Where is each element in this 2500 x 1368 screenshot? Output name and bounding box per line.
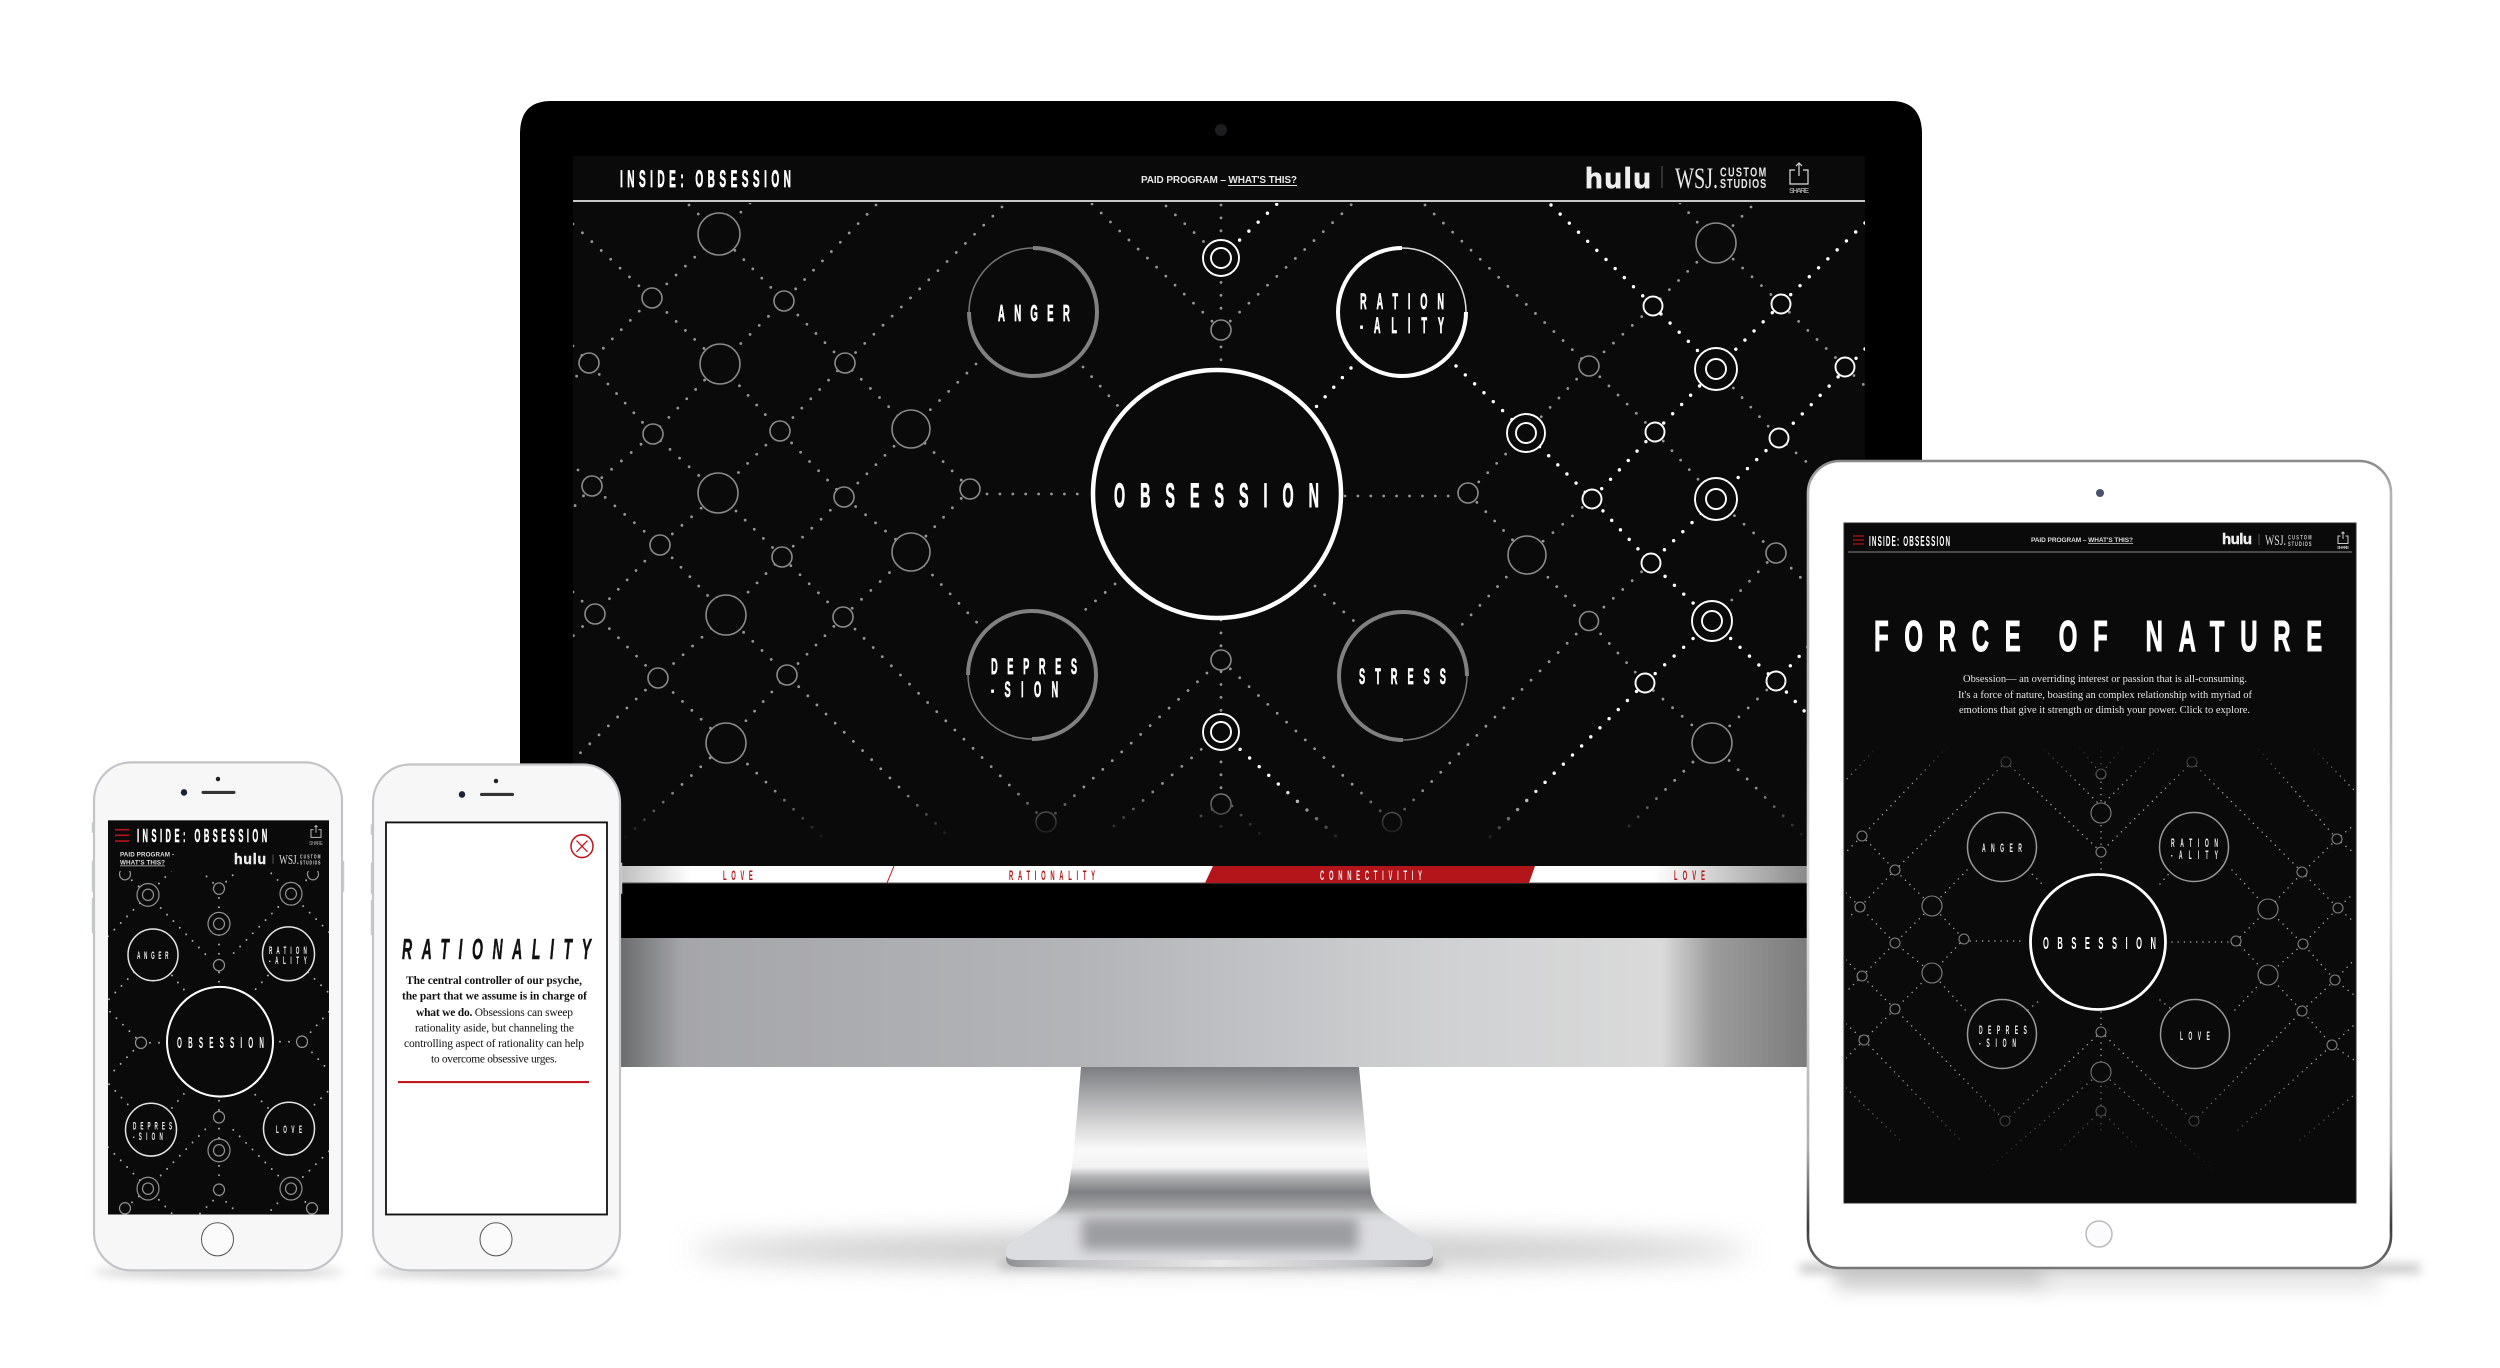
tablet node: rationality (2160, 812, 2228, 882)
tablet home button (2086, 1221, 2112, 1247)
icon: phone 1 share (309, 826, 324, 847)
phone 2 body text: controlling aspect of rationality can help (404, 1037, 584, 1050)
phone 1 home button (202, 1223, 234, 1256)
tablet logos: WSJ. (2265, 533, 2286, 549)
logo: WSJ custom studios: WSJ. (1675, 162, 1718, 195)
tablet body (1808, 461, 2391, 1268)
white nodes (1582, 294, 1854, 692)
tablet intro text: It's a force of nature, boasting an complex relationship with myriad of (1958, 690, 2252, 701)
phone 2 screen (386, 822, 607, 1214)
tablet (1808, 461, 2391, 1268)
phone 1 node: obsession (167, 987, 273, 1097)
phone 2 body (373, 764, 620, 1270)
phone 1 node: obsession: OBSESSION (177, 1034, 264, 1052)
phone 2 body text: to overcome obsessive urges. (431, 1052, 557, 1065)
monitor shadow (690, 1235, 1750, 1268)
white dotted connectors (1221, 204, 1865, 840)
monitor screen (573, 156, 1865, 884)
node: anger: ANGER (998, 300, 1070, 326)
logo: WSJ custom studios: STUDIOS (1720, 178, 1767, 191)
tablet lattice fades (1846, 743, 2354, 1175)
bottom fade of lattice (573, 785, 1865, 842)
phone 2 body text (402, 974, 587, 1065)
tablet node: love (2160, 1000, 2230, 1068)
header rule (573, 200, 1865, 202)
phone 1 lattice (108, 868, 329, 1214)
phone 1 node: rationality: -ALITY (269, 954, 307, 967)
tablet logos (2222, 531, 2312, 549)
tablet paid program: PAID PROGRAM – WHAT'S THIS? (2031, 537, 2133, 544)
phone 1 (93, 762, 343, 1270)
icon: tablet menu (1853, 536, 1864, 544)
phone 1 node: depression: -SION (133, 1130, 163, 1143)
phone 1 paid program: PAID PROGRAM - (120, 851, 174, 859)
phone 1 node: rationality (262, 927, 314, 981)
screen background (573, 156, 1865, 866)
nav label: love: LOVE (723, 868, 753, 884)
dotted lattice (573, 203, 1865, 840)
phone 1 node: love: LOVE (276, 1122, 302, 1135)
tablet node: love: LOVE (2180, 1030, 2210, 1043)
tablet camera (2096, 489, 2104, 497)
tablet title: INSIDE: OBSESSION (1869, 534, 1950, 550)
phone 1 logos (234, 852, 321, 868)
icon: tablet share: SHARE (2337, 545, 2349, 550)
phone 2 heading: RATIONALITY (402, 932, 592, 965)
phone 1 paid program (120, 851, 174, 866)
phone 1 logos: hulu (234, 852, 266, 868)
concentric white nodes (1203, 240, 1737, 750)
tablet headline: FORCE OF NATURE (1874, 611, 2322, 661)
phone 2 body text: the part that we assume is in charge of (402, 989, 587, 1002)
phone 1 logos: STUDIOS (300, 859, 320, 866)
node: stress: STRESS (1359, 664, 1446, 689)
phone 2 body text: rationality aside, but channeling the (415, 1021, 574, 1034)
tablet node: depression (1968, 1000, 2036, 1068)
phone 1 logos: WSJ. (279, 852, 299, 867)
phone 2 body text: what we do. Obsessions can sweep (416, 1006, 573, 1019)
nav label: love repeat: LOVE (1674, 868, 1705, 884)
nav label: connectivity: CONNECTIVITIY (1320, 868, 1422, 884)
node: rationality: RATION (1360, 289, 1444, 314)
phone 1 side buttons (93, 822, 343, 933)
tablet intro text: emotions that give it strength or dimish your power. Click to explore. (1959, 705, 2250, 716)
nav label: rationality: RATIONALITY (1009, 868, 1095, 884)
phone 1 node: rationality: RATION (269, 943, 307, 956)
node: anger (969, 248, 1097, 376)
phone 1 node: anger (128, 929, 178, 981)
icon: share: SHARE (1789, 186, 1809, 195)
paid program link: PAID PROGRAM – WHAT'S THIS? (1141, 175, 1297, 186)
tablet intro text: Obsession— an overriding interest or passion that is all-consuming. (1963, 674, 2247, 685)
phone 2 sensor and speaker (459, 779, 514, 798)
phone 1 node: anger: ANGER (137, 948, 169, 962)
phone 1 node: depression (126, 1103, 176, 1156)
phone shadows (93, 1266, 622, 1278)
gray dotted connectors (573, 203, 1865, 840)
phone 2 home button (480, 1223, 512, 1256)
tablet lattice (1846, 743, 2354, 1180)
phone 1 body (94, 762, 342, 1270)
icon: tablet share (2337, 532, 2349, 550)
phone 2 (372, 764, 621, 1270)
monitor chin: silver panel (520, 938, 1810, 1067)
tablet logos: hulu (2222, 531, 2252, 548)
phone 1 sensor and speaker (181, 777, 236, 796)
tablet intro text (1958, 674, 2252, 716)
monitor webcam (1215, 124, 1227, 136)
logo: WSJ custom studios (1662, 162, 1767, 195)
phone 1 screen (108, 820, 329, 1214)
gray nodes (579, 213, 1786, 832)
icon: close button (571, 835, 593, 858)
icon: share (1789, 163, 1809, 195)
tablet shadow (1800, 1264, 2420, 1290)
tablet node: depression: DEPRES (1979, 1024, 2027, 1037)
tablet screen (1844, 523, 2356, 1203)
icon: phone 1 menu (115, 830, 129, 841)
logo: WSJ custom studios: CUSTOM (1720, 166, 1766, 180)
tablet node: obsession: OBSESSION (2043, 933, 2156, 953)
node: depression: DEPRES (991, 654, 1077, 679)
node: depression (968, 611, 1096, 739)
navigation bar (573, 866, 1865, 884)
logo: hulu: hulu (1585, 163, 1651, 195)
phone 1 node: depression: DEPRES (133, 1119, 172, 1132)
phone 1 paid program: WHAT'S THIS? (120, 859, 165, 866)
tablet logos: STUDIOS (2288, 541, 2312, 548)
node: rationality: -ALITY (1360, 313, 1444, 338)
node: depression: -SION (991, 677, 1058, 702)
tablet node: anger: ANGER (1982, 842, 2022, 855)
phone 2 body text: The central controller of our psyche, (406, 974, 582, 987)
phone 1 title: INSIDE: OBSESSION (137, 826, 267, 847)
tablet node: obsession (2030, 874, 2166, 1010)
icon: phone 1 share: SHARE (309, 841, 324, 847)
tablet node: rationality: -ALITY (2171, 849, 2218, 862)
header title: INSIDE: OBSESSION (620, 165, 791, 192)
tablet node: rationality: RATION (2171, 837, 2218, 850)
node: rationality (1338, 248, 1466, 376)
tablet node: anger (1968, 812, 2036, 882)
node: obsession (1093, 370, 1341, 618)
node: obsession: OBSESSION (1114, 476, 1319, 515)
phone 1 logos: CUSTOM (300, 854, 321, 860)
tablet node: depression: -SION (1979, 1037, 2016, 1050)
phone 2 side buttons (372, 824, 621, 935)
tablet header rule (1848, 552, 2352, 553)
tablet logos: CUSTOM (2288, 535, 2312, 542)
node: stress (1339, 612, 1467, 740)
monitor body (520, 101, 1922, 1067)
phone 1 node: love (264, 1102, 314, 1155)
monitor stand (1006, 1067, 1433, 1267)
